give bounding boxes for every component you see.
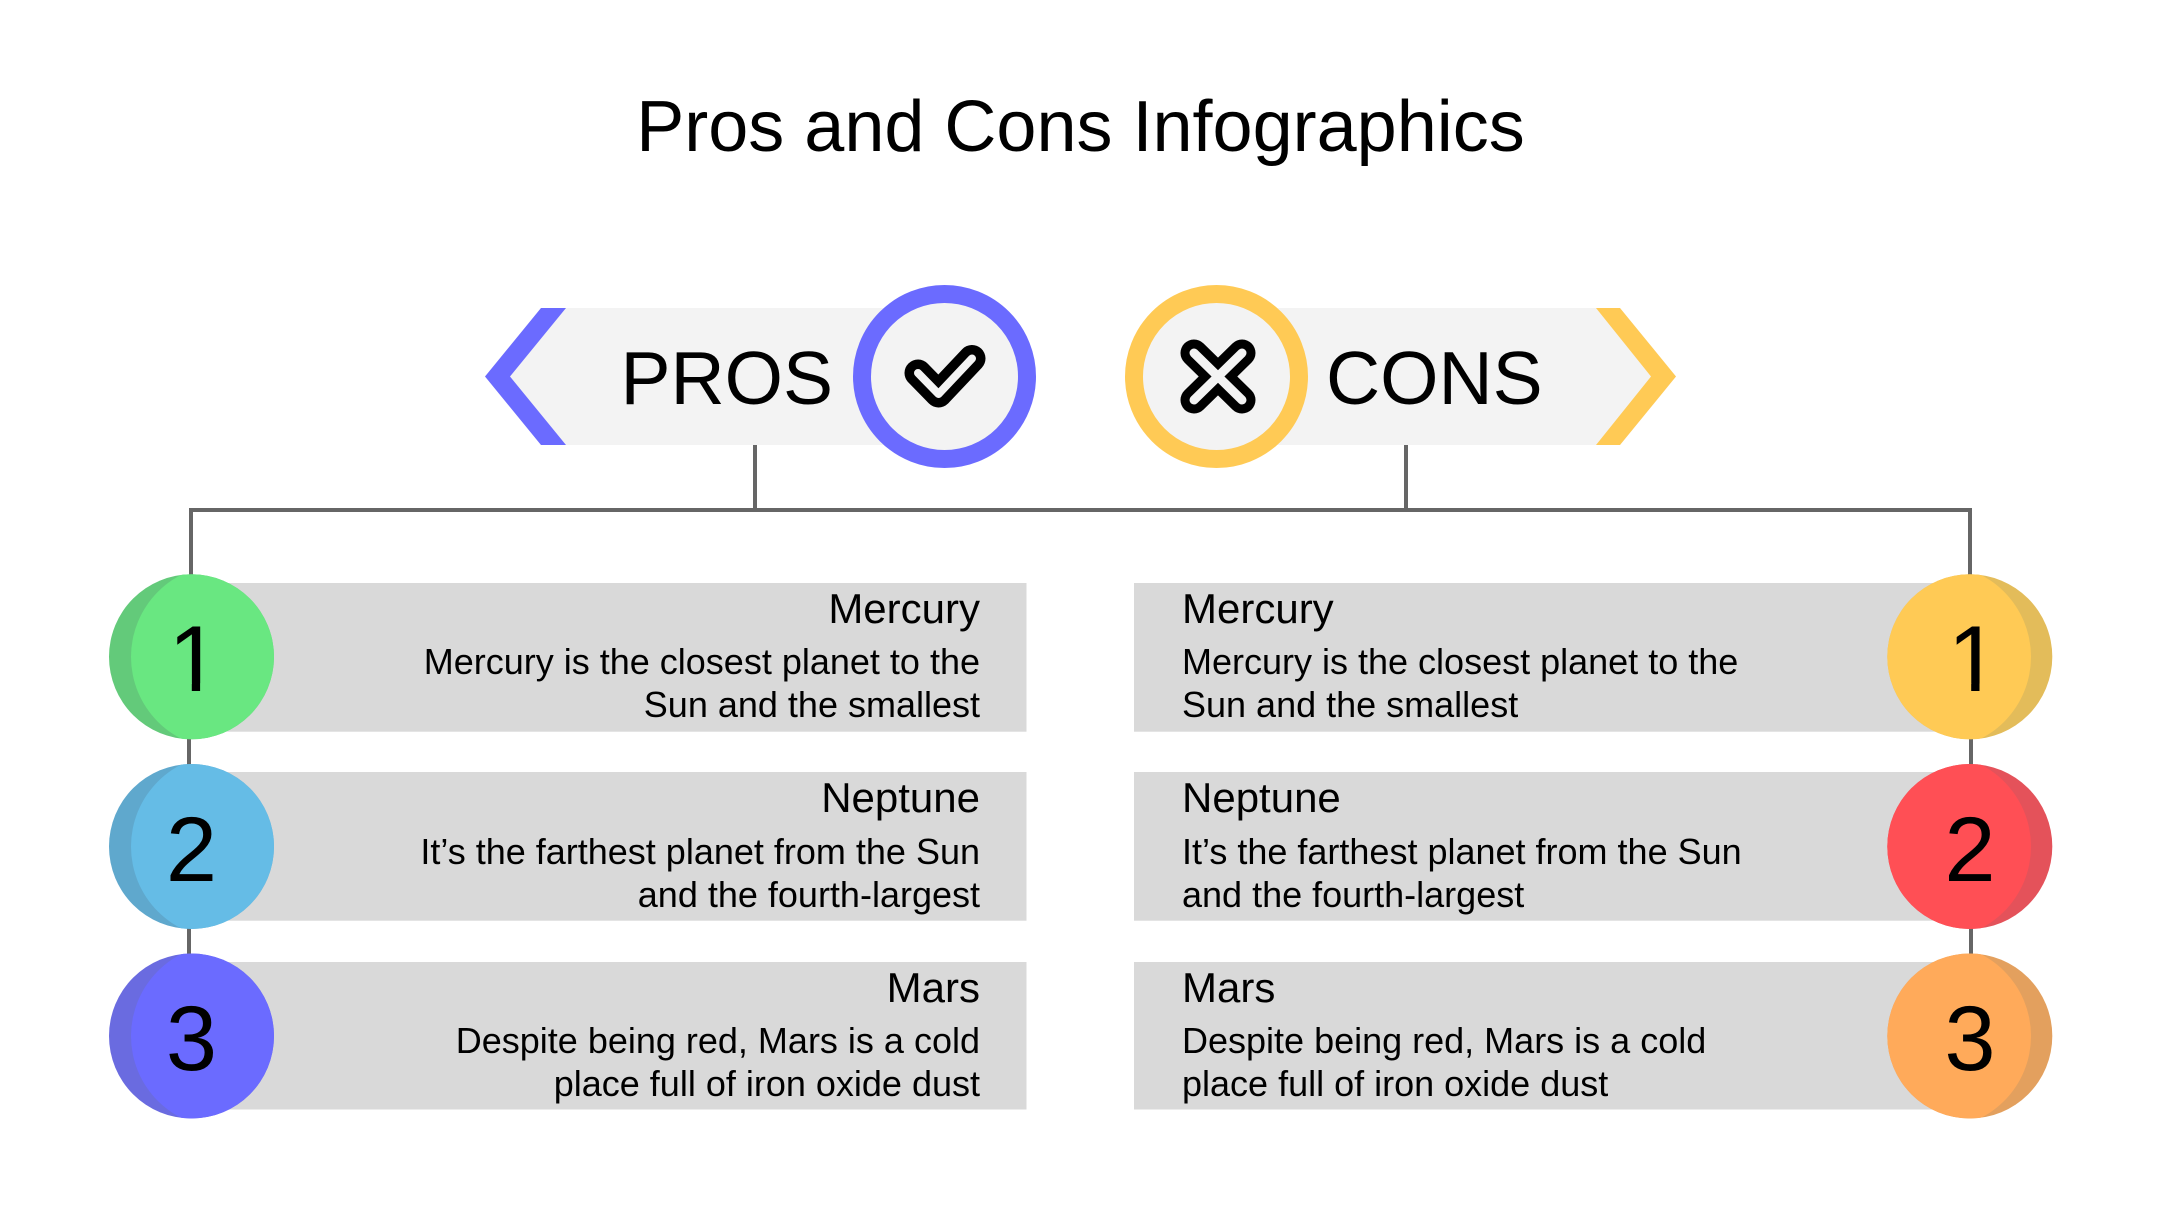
pros badge 2 (blue) (109, 764, 274, 929)
cons row 2 heading: Neptune (1182, 774, 1341, 821)
pros row 3 text line 2: place full of iron oxide dust (554, 1063, 980, 1104)
pros row 1 text line 2: Sun and the smallest (644, 684, 980, 725)
cons chevron (1596, 308, 1676, 445)
cons row 3 text: Despite being red, Mars is a cold (1182, 1020, 1706, 1061)
cons row 2: Neptune (1134, 772, 1960, 921)
cons row 2 text: It’s the farthest planet from the Sun (1182, 831, 1742, 872)
pros badge circle (862, 294, 1027, 459)
pros row 1 heading: Mercury (828, 585, 980, 632)
connector lines (189, 445, 1971, 960)
pros label: PROS (620, 336, 833, 420)
infographic canvas (109, 98, 2052, 1118)
icon: check mark (918, 358, 972, 394)
pros row 3: Mars (200, 962, 1026, 1110)
title: Pros and Cons Infographics (636, 87, 1525, 167)
pros banner (485, 294, 1027, 459)
pros row 2 heading: Neptune (821, 774, 980, 821)
cons row 2 text line 2: and the fourth-largest (1182, 874, 1524, 915)
cons label: CONS (1326, 336, 1543, 420)
cons badge 1 (yellow) (1887, 574, 2052, 740)
cons badge circle (1134, 294, 1299, 459)
cons row 3 text line 2: place full of iron oxide dust (1182, 1063, 1608, 1104)
pros row 2 text: It’s the farthest planet from the Sun (420, 831, 980, 872)
pros badge 3 (purple): 3 (166, 988, 217, 1090)
pros badge 1 (green) (109, 574, 274, 740)
pros row 1 text: Mercury is the closest planet to the (424, 641, 980, 682)
pros row 2 text line 2: and the fourth-largest (638, 874, 980, 915)
pros row 3 text: Despite being red, Mars is a cold (456, 1020, 980, 1061)
pros row 1: Mercury (200, 583, 1026, 732)
pros badge 1 (green): 1 (168, 606, 220, 711)
cons banner (1134, 294, 1676, 459)
cons row 1: Mercury (1134, 583, 1960, 732)
cons row 1 text line 2: Sun and the smallest (1182, 684, 1518, 725)
cons badge 3 (orange): 3 (1944, 988, 1996, 1090)
pros row 3 heading: Mars (887, 964, 980, 1011)
pros badge 2 (blue): 2 (166, 799, 217, 901)
cons badge 2 (red) (1887, 764, 2052, 929)
cons badge 3 (orange) (1887, 954, 2052, 1118)
cons row 1 text: Mercury is the closest planet to the (1182, 641, 1738, 682)
cons row 1 heading: Mercury (1182, 585, 1334, 632)
pros chevron (485, 308, 566, 445)
cons row 3 heading: Mars (1182, 964, 1275, 1011)
pros badge 3 (purple) (109, 954, 274, 1118)
cons badge 1 (yellow): 1 (1948, 606, 2000, 711)
pros row 2: Neptune (200, 772, 1026, 921)
cons badge 2 (red): 2 (1944, 799, 1996, 901)
cons row 3: Mars (1134, 962, 1960, 1110)
icon: cross mark (1194, 353, 1242, 400)
